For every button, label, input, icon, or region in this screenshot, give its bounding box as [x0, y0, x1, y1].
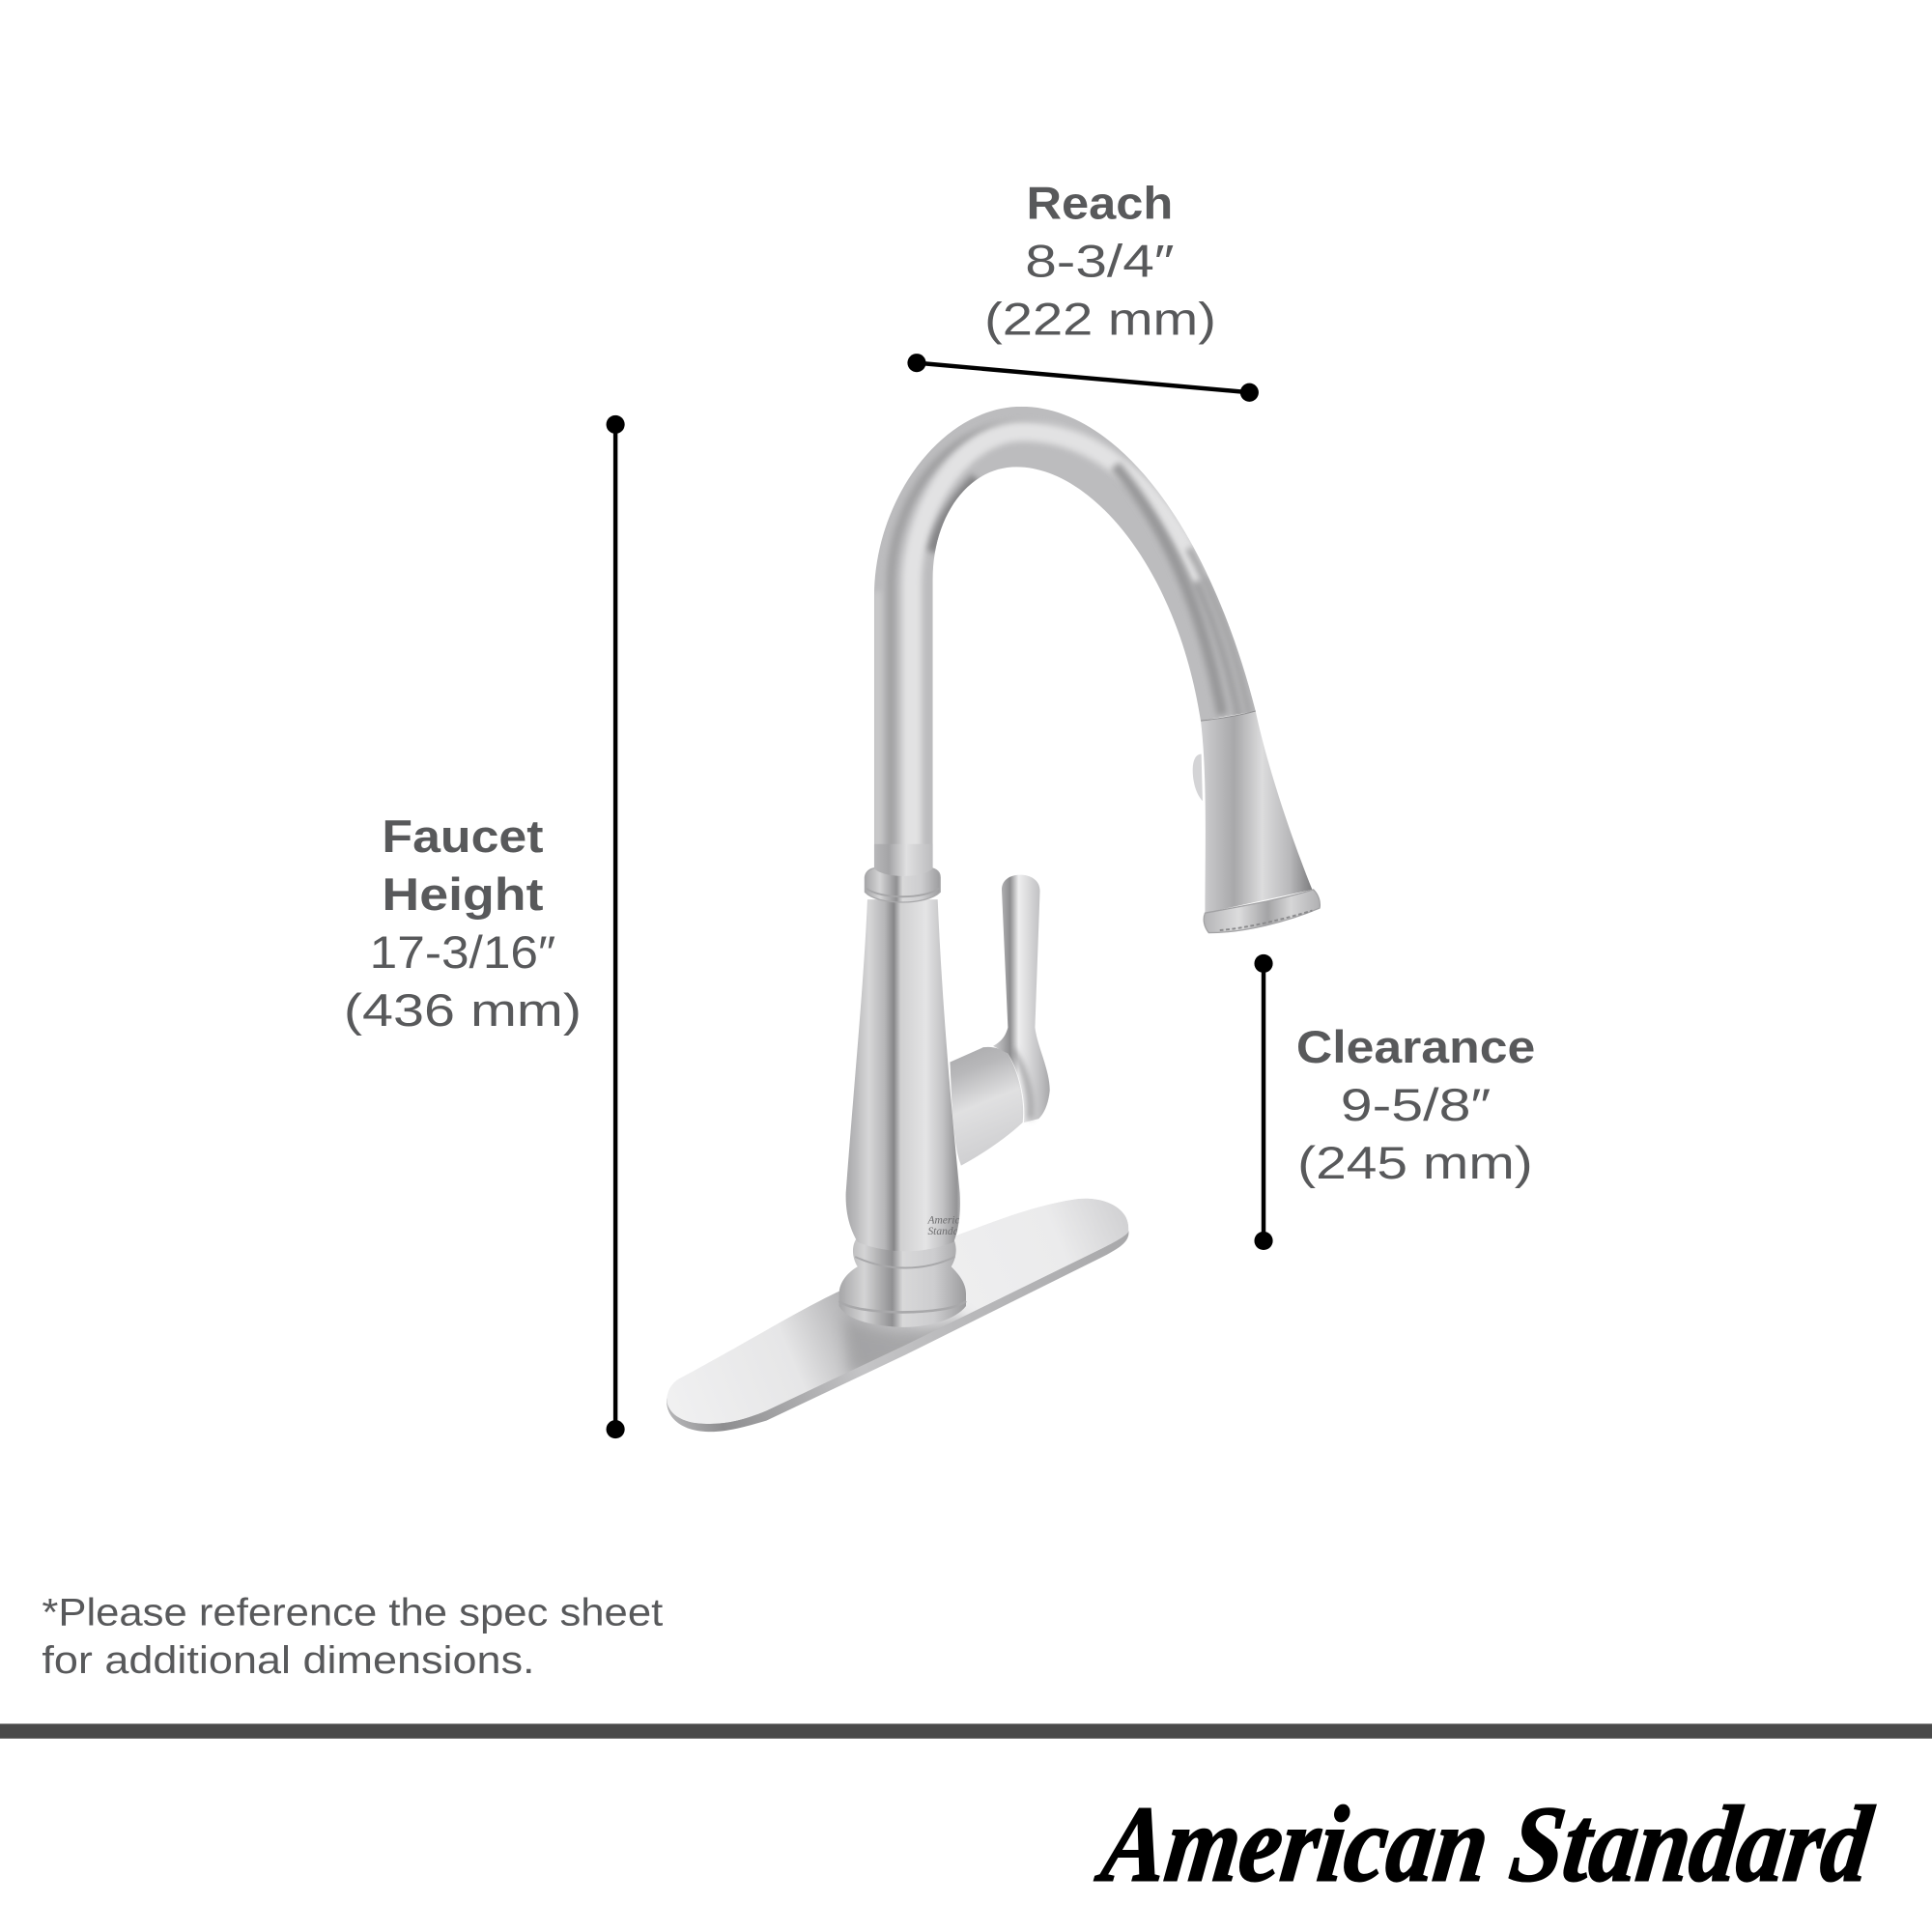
label: clearance — [1296, 1022, 1535, 1189]
engraved logo on body: Standard — [927, 1226, 968, 1237]
label: faucet height: (436 mm) — [344, 985, 582, 1037]
faucet illustration — [667, 425, 1320, 1432]
label: faucet height: Faucet — [382, 811, 544, 863]
label: reach: (222 mm) — [984, 294, 1216, 345]
faucet base — [839, 1237, 966, 1327]
footer divider bar — [0, 1723, 1932, 1739]
lever handle — [950, 875, 1050, 1166]
dimension line: clearance — [1254, 954, 1273, 1250]
label: clearance: (245 mm) — [1297, 1138, 1533, 1189]
label: reach: Reach — [1026, 178, 1173, 229]
pull-down spray head — [1193, 711, 1320, 933]
label: faucet height: Height — [382, 869, 544, 921]
faucet body — [846, 844, 960, 1251]
footnote — [42, 1591, 663, 1682]
footnote: *Please reference the spec sheet — [42, 1591, 663, 1634]
spout — [877, 425, 1249, 887]
footnote: for additional dimensions. — [42, 1639, 535, 1682]
label: reach — [984, 178, 1216, 345]
dimension line: reach — [907, 354, 1259, 402]
engraved logo on body: American — [926, 1215, 971, 1227]
deck plate — [667, 1199, 1128, 1432]
label: clearance: Clearance — [1296, 1022, 1535, 1073]
label: faucet height — [344, 811, 582, 1037]
label: faucet height: 17-3/16″ — [370, 927, 555, 979]
label: clearance: 9-5/8″ — [1341, 1080, 1491, 1131]
dimension line: faucet height — [607, 415, 625, 1438]
engraved logo on body — [927, 1216, 960, 1235]
label: reach: 8-3/4″ — [1025, 236, 1175, 287]
